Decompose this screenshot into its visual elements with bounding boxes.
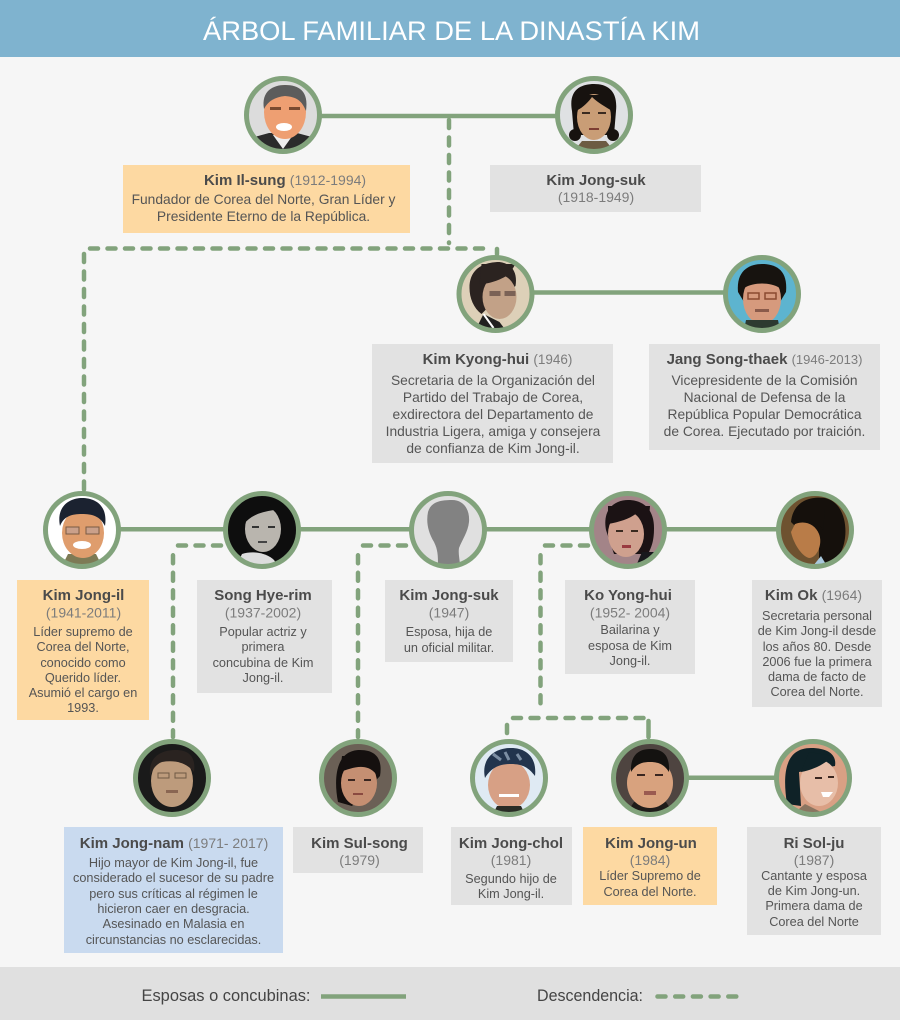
legend bar bbox=[0, 967, 900, 1020]
info box: Kim Sul-song: (1979) bbox=[339, 852, 380, 868]
info box: Kim Jong-suk (1918): (1918-1949) bbox=[558, 189, 634, 205]
info box: Kim Jong-suk (1918): Kim Jong-suk bbox=[546, 172, 646, 189]
info box: Song Hye-rim: primera bbox=[241, 640, 285, 654]
portrait: Jang Song-thaek bbox=[726, 258, 798, 330]
info box: Kim Kyong-hui: de confianza de Kim Jong-il. bbox=[406, 441, 580, 456]
info box: Kim Jong-chol: Kim Jong-chol bbox=[459, 835, 563, 852]
portrait: Kim Jong-il bbox=[46, 494, 118, 566]
person: Kim Jong-il bbox=[17, 494, 149, 720]
solid spouse lines bbox=[119, 116, 778, 778]
info box: Kim Jong-un bbox=[583, 827, 717, 905]
person: Kim Jong-suk (1947) bbox=[385, 494, 513, 662]
info box: Kim Ok: de Kim Jong-il desde bbox=[758, 624, 876, 638]
portrait: Kim Ok bbox=[778, 494, 852, 566]
info box: Kim Jong-un: Líder Supremo de bbox=[599, 869, 701, 883]
info box: Kim Jong-nam: pero sus críticas al régimen le bbox=[89, 887, 258, 901]
info box: Kim Jong-suk (1947): Esposa, hija de bbox=[406, 625, 492, 639]
info box: Kim Kyong-hui: Partido del Trabajo de Corea, bbox=[403, 390, 583, 405]
info box: Ri Sol-ju: (1987) bbox=[794, 852, 834, 868]
info box: Ko Yong-hui: Ko Yong-hui bbox=[584, 587, 672, 604]
person: Kim Jong-chol bbox=[451, 742, 572, 905]
info box: Kim Ok: los años 80. Desde bbox=[763, 640, 871, 654]
portrait: Ri Sol-ju bbox=[776, 742, 850, 814]
info box: Kim Jong-un: Kim Jong-un bbox=[605, 835, 697, 852]
info box: Ko Yong-hui bbox=[565, 580, 695, 674]
info box: Song Hye-rim: (1937-2002) bbox=[225, 604, 301, 620]
info box: Kim Jong-nam: hicieron caer en desgracia. bbox=[97, 902, 250, 916]
info box: Kim Sul-song bbox=[293, 827, 423, 873]
info box: Kim Jong-il: Corea del Norte, bbox=[36, 640, 130, 654]
info box: Kim Jong-il: Asumió el cargo en bbox=[29, 686, 137, 700]
person: Jang Song-thaek bbox=[649, 258, 880, 450]
title banner bbox=[0, 0, 900, 57]
info box: Song Hye-rim: Popular actriz y bbox=[219, 625, 307, 639]
info box: Kim Ok: 2006 fue la primera bbox=[762, 655, 873, 669]
info box: Kim Kyong-hui: Secretaria de la Organización del bbox=[391, 373, 595, 388]
info box: Kim Jong-nam: Hijo mayor de Kim Jong-il, fue bbox=[89, 856, 258, 870]
info box: Kim Jong-chol bbox=[451, 827, 572, 905]
info box: Kim Ok bbox=[752, 580, 882, 707]
info box: Kim Ok: Corea del Norte. bbox=[770, 685, 864, 699]
portrait: Kim Jong-nam bbox=[136, 742, 208, 814]
info box: Kim Jong-il: Querido líder. bbox=[45, 671, 121, 685]
info box: Song Hye-rim: Song Hye-rim bbox=[214, 587, 312, 604]
info box: Kim Il-sung: Presidente Eterno de la República. bbox=[157, 209, 370, 224]
portrait: Song Hye-rim bbox=[226, 494, 298, 566]
info box: Jang Song-thaek: de Corea. Ejecutado por traición. bbox=[664, 424, 865, 439]
info box: Kim Jong-suk (1947): (1947) bbox=[429, 604, 469, 620]
info box: Jang Song-thaek: Jang Song-thaek (1946-2013) bbox=[667, 351, 862, 368]
portrait: silhouette bbox=[412, 494, 484, 566]
info box: Kim Kyong-hui bbox=[372, 344, 613, 463]
info box: Song Hye-rim bbox=[197, 580, 332, 693]
info box: Jang Song-thaek: Nacional de Defensa de la bbox=[684, 390, 846, 405]
person: Kim Jong-suk (1918) bbox=[490, 78, 701, 212]
person: Kim Kyong-hui bbox=[372, 258, 613, 463]
person: Song Hye-rim bbox=[197, 494, 332, 693]
info box: Jang Song-thaek: Vicepresidente de la Comisión bbox=[671, 373, 858, 388]
info box: Ri Sol-ju: de Kim Jong-un. bbox=[768, 884, 860, 898]
info box: Kim Jong-il: conocido como bbox=[40, 656, 126, 670]
info box: Kim Jong-un: Corea del Norte. bbox=[603, 885, 697, 899]
info box: Ri Sol-ju: Primera dama de bbox=[765, 899, 863, 913]
info box: Kim Jong-il: Kim Jong-il bbox=[43, 587, 124, 604]
person: Ri Sol-ju bbox=[747, 742, 881, 935]
info box: Kim Ok: Kim Ok (1964) bbox=[765, 587, 862, 604]
dashed descent lines bbox=[84, 120, 648, 737]
info box: Ri Sol-ju bbox=[747, 827, 881, 935]
person: Ko Yong-hui bbox=[565, 494, 695, 674]
info box: Jang Song-thaek: República Popular Democrática bbox=[667, 407, 862, 422]
portrait: Kim Jong-un bbox=[614, 742, 686, 814]
info box: Kim Jong-il: 1993. bbox=[67, 701, 99, 715]
info box: Kim Kyong-hui: Industria Ligera, amiga y consejera bbox=[386, 424, 601, 439]
info box: Kim Il-sung: Fundador de Corea del Norte, Gran Líder y bbox=[132, 192, 396, 207]
portrait: Kim Sul-song bbox=[322, 742, 394, 814]
info box: Kim Ok: dama de facto de bbox=[768, 670, 866, 684]
info box: Kim Jong-suk (1918) bbox=[490, 165, 701, 212]
portrait: Kim Jong-suk (1918) bbox=[558, 78, 630, 152]
portrait: Ko Yong-hui bbox=[592, 494, 664, 566]
info box: Song Hye-rim: concubina de Kim bbox=[213, 656, 313, 670]
info box: Ko Yong-hui: (1952- 2004) bbox=[590, 604, 670, 620]
info box: Kim Jong-nam: circunstancias no esclarecidas. bbox=[86, 933, 261, 947]
person: Kim Jong-un bbox=[583, 742, 717, 905]
portrait: Kim Kyong-hui bbox=[459, 258, 532, 330]
info box: Kim Kyong-hui: Kim Kyong-hui (1946) bbox=[423, 351, 572, 368]
person: Kim Sul-song bbox=[293, 742, 423, 873]
legend: descent: Descendencia: bbox=[537, 987, 643, 1005]
info box: Kim Il-sung: Kim Il-sung (1912-1994) bbox=[204, 172, 366, 189]
info box: Kim Jong-nam: considerado el sucesor de su padre bbox=[73, 871, 274, 885]
person: Kim Il-sung bbox=[123, 78, 410, 233]
info box: Kim Kyong-hui: exdirectora del Departamento de bbox=[393, 407, 594, 422]
info box: Kim Jong-nam bbox=[64, 827, 283, 953]
info box: Ri Sol-ju: Cantante y esposa bbox=[761, 869, 868, 883]
portrait: Kim Jong-chol bbox=[472, 742, 546, 814]
info box: Kim Ok: Secretaria personal bbox=[762, 609, 872, 623]
title banner: ÁRBOL FAMILIAR DE LA DINASTÍA KIM bbox=[203, 16, 700, 46]
info box: Kim Jong-suk (1947): un oficial militar. bbox=[404, 641, 494, 655]
info box: Ri Sol-ju: Corea del Norte bbox=[769, 915, 859, 929]
info box: Kim Sul-song: Kim Sul-song bbox=[311, 835, 408, 852]
info box: Kim Jong-il: (1941-2011) bbox=[46, 604, 121, 620]
info box: Jang Song-thaek bbox=[649, 344, 880, 450]
info box: Kim Jong-suk (1947): Kim Jong-suk bbox=[399, 587, 499, 604]
info box: Kim Jong-nam: Asesinado en Malasia en bbox=[103, 917, 244, 931]
legend: spouses: Esposas o concubinas: bbox=[142, 987, 310, 1005]
portrait: Kim Il-sung bbox=[246, 78, 320, 152]
person: Kim Ok bbox=[752, 494, 882, 707]
info box: Ko Yong-hui: Jong-il. bbox=[610, 654, 650, 668]
info box: Kim Jong-chol: Kim Jong-il. bbox=[478, 887, 544, 901]
info box: Ko Yong-hui: Bailarina y bbox=[600, 623, 660, 637]
info box: Kim Jong-il: Líder supremo de bbox=[33, 625, 133, 639]
info box: Kim Il-sung bbox=[123, 165, 410, 233]
info box: Kim Jong-chol: Segundo hijo de bbox=[465, 872, 557, 886]
info box: Kim Jong-il bbox=[17, 580, 149, 720]
info box: Kim Jong-suk (1947) bbox=[385, 580, 513, 662]
info box: Kim Jong-chol: (1981) bbox=[491, 852, 531, 868]
info box: Ri Sol-ju: Ri Sol-ju bbox=[784, 835, 844, 852]
info box: Song Hye-rim: Jong-il. bbox=[243, 671, 283, 685]
info box: Kim Jong-nam: Kim Jong-nam (1971- 2017) bbox=[80, 835, 268, 852]
info box: Kim Jong-un: (1984) bbox=[630, 852, 670, 868]
info box: Ko Yong-hui: esposa de Kim bbox=[588, 639, 672, 653]
person: Kim Jong-nam bbox=[64, 742, 283, 953]
